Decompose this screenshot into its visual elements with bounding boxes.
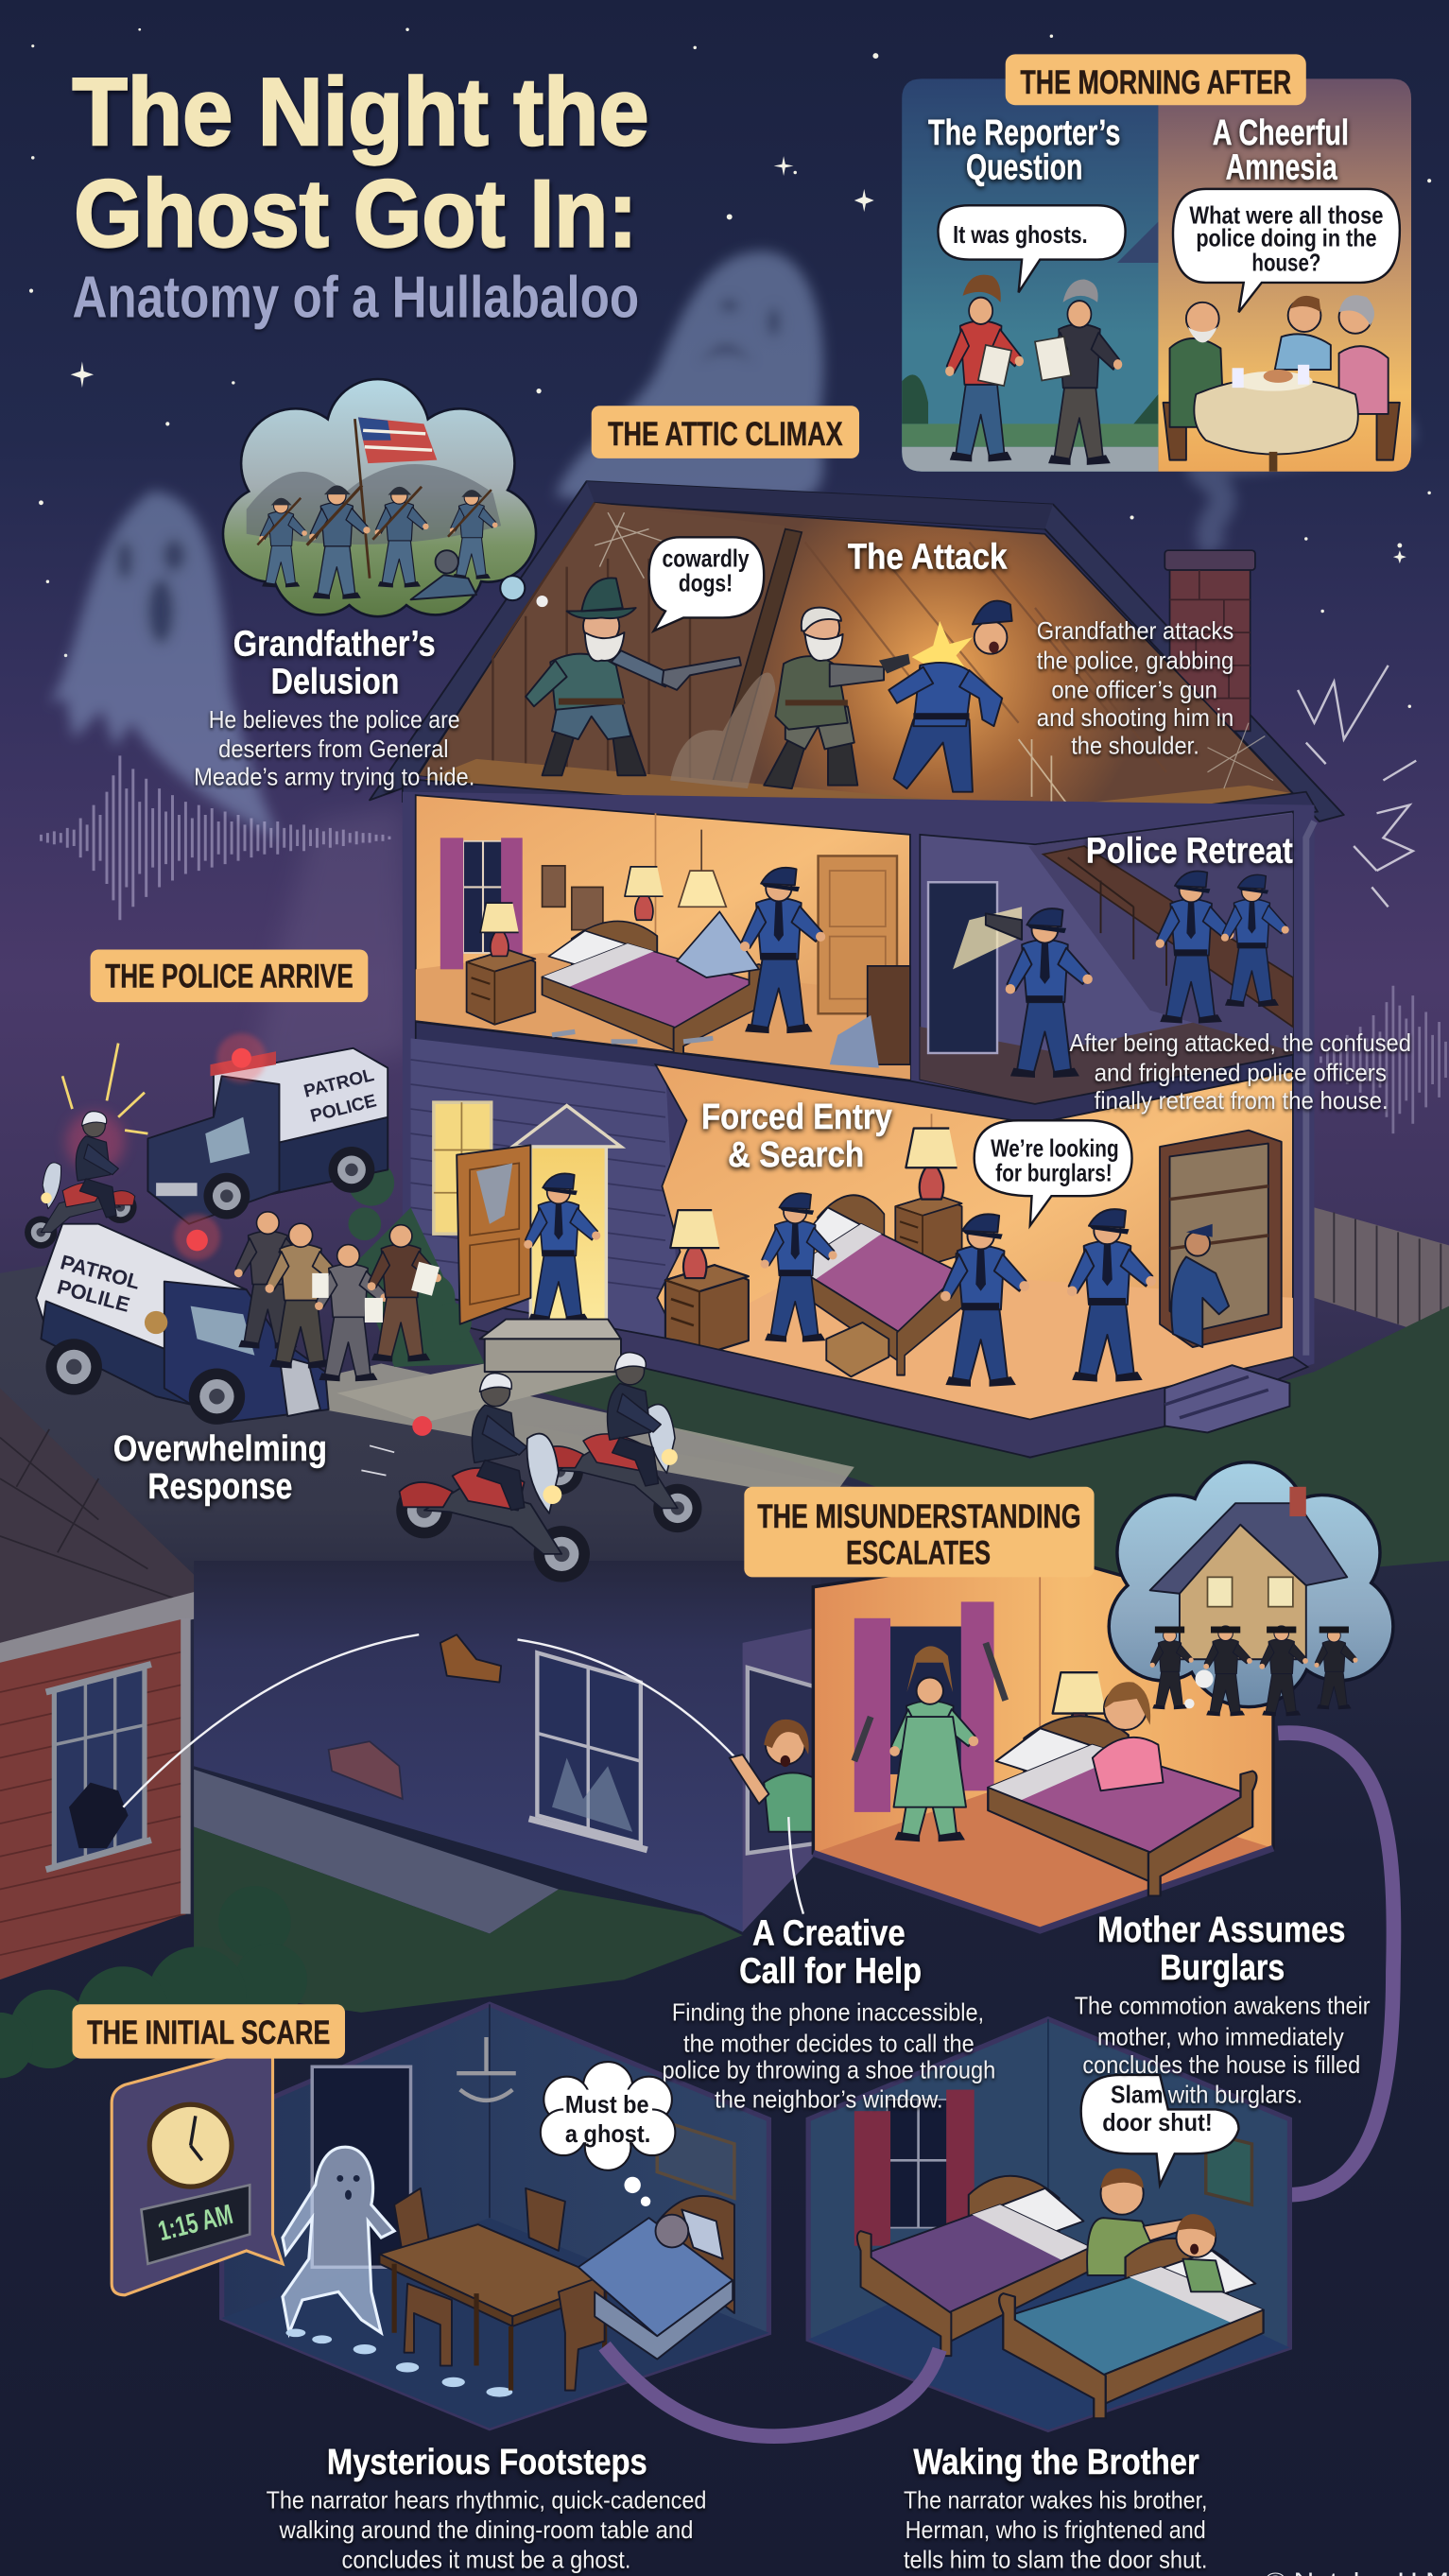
heading: grandfather's delusion: Delusion bbox=[271, 661, 399, 701]
panel: mother's bedroom bbox=[813, 1552, 1273, 1930]
title bbox=[72, 60, 649, 330]
neighbor's broken window bbox=[46, 1664, 151, 1870]
heading: a cheerful amnesia: Amnesia bbox=[1226, 147, 1337, 187]
shrubs by the house bbox=[348, 1122, 485, 1367]
sidewalk along side wall bbox=[194, 1770, 559, 1933]
thought dots: grandfather bbox=[500, 576, 548, 607]
heading: mother assumes burglars bbox=[1097, 1910, 1345, 1988]
heading: a cheerful amnesia bbox=[1213, 112, 1349, 187]
heading: overwhelming response bbox=[113, 1428, 327, 1507]
bubble: slam door shut bbox=[1081, 2075, 1239, 2185]
lawn patch bbox=[194, 1827, 743, 2013]
pointer to a creative call for help bbox=[788, 1817, 803, 1914]
text: mother assumes description bbox=[1075, 1992, 1371, 2108]
bubble: cowardly dogs: cowardly bbox=[662, 545, 750, 573]
text: waking the brother description: The narrator wakes his brother, bbox=[904, 2486, 1208, 2515]
title: The Night the bbox=[72, 60, 649, 165]
text: the attack description: Grandfather attacks bbox=[1037, 616, 1233, 645]
heading: overwhelming response: Overwhelming bbox=[113, 1428, 327, 1469]
muzzle flash bbox=[912, 621, 973, 690]
heading: grandfather's delusion bbox=[233, 623, 436, 701]
heading: waking the brother: Waking the Brother bbox=[913, 2442, 1199, 2482]
label: the morning after bbox=[1006, 54, 1306, 105]
heading: a creative call for help: A Creative bbox=[752, 1913, 906, 1954]
text: the attack description: and shooting him in bbox=[1037, 703, 1233, 732]
text: mysterious footsteps description bbox=[267, 2486, 706, 2573]
heading: overwhelming response: Response bbox=[147, 1466, 292, 1507]
heading: a cheerful amnesia: A Cheerful bbox=[1213, 112, 1349, 153]
text: creative call description: police by throwing a shoe through bbox=[662, 2055, 995, 2083]
heading: a creative call for help: Call for Help bbox=[739, 1951, 922, 1992]
text: mysterious footsteps description: walking around the dining-room table and bbox=[279, 2515, 693, 2544]
icon: patrol truck, upper bbox=[147, 1033, 388, 1224]
text: waking the brother description: Herman, who is frightened and bbox=[906, 2515, 1206, 2544]
heading: forced entry and search bbox=[701, 1097, 892, 1175]
thought dots: burglars bbox=[1184, 1670, 1214, 1708]
text: grandfather's delusion description bbox=[194, 705, 474, 791]
side wall window bbox=[529, 1652, 647, 1850]
thought cloud: burglars bbox=[1107, 1461, 1395, 1716]
house upper wall bbox=[403, 792, 1314, 1456]
figure: glowing ghost bbox=[283, 2147, 394, 2333]
bubble: slam door shut: door shut! bbox=[1102, 2108, 1213, 2136]
footprints bbox=[285, 2328, 512, 2397]
ghost: large background spirit bbox=[555, 251, 823, 503]
heading: mother assumes burglars: Mother Assumes bbox=[1097, 1910, 1345, 1950]
label: the misunderstanding escalates: ESCALATES bbox=[846, 1535, 991, 1571]
text: the attack description bbox=[1037, 616, 1233, 760]
text: grandfather's delusion description: He believes the police are bbox=[209, 705, 460, 734]
text: police retreat description bbox=[1070, 1029, 1411, 1115]
figure: older reporter in suit bbox=[1035, 279, 1122, 465]
bubble: it was ghosts: It was ghosts. bbox=[953, 220, 1088, 249]
panel: police retreat room bbox=[920, 812, 1293, 1104]
heading: the reporter's question bbox=[928, 112, 1120, 187]
label: the initial scare: THE INITIAL SCARE bbox=[87, 2015, 330, 2051]
figure: young reporter bbox=[945, 275, 1024, 461]
icon: patrol truck, lower bbox=[36, 1214, 329, 1425]
heading: mother assumes burglars: Burglars bbox=[1160, 1947, 1285, 1988]
text: mysterious footsteps description: concludes it must be a ghost. bbox=[342, 2545, 630, 2573]
bubble: what were all those police: house? bbox=[1251, 249, 1320, 277]
text: the attack description: one officer’s gun bbox=[1051, 676, 1217, 704]
figure: mother at the window bbox=[730, 1668, 817, 1853]
text: grandfather's delusion description: Meade’s army trying to hide. bbox=[194, 763, 474, 791]
label: the attic climax bbox=[592, 406, 859, 458]
icon: flying shoe bbox=[440, 1634, 501, 1683]
picture on dining wall bbox=[657, 2119, 734, 2198]
stars bbox=[29, 28, 1431, 708]
arrow: shoe trajectory to neighbor's window bbox=[123, 1634, 419, 1807]
text: mother assumes description: concludes the house is filled bbox=[1082, 2050, 1360, 2079]
text: mysterious footsteps description: The narrator hears rhythmic, quick-cadenced bbox=[267, 2486, 706, 2515]
text: waking the brother description bbox=[904, 2486, 1208, 2573]
text: police retreat description: and frightened police officers bbox=[1095, 1059, 1387, 1087]
heading: police retreat: Police Retreat bbox=[1086, 830, 1293, 871]
heading: the reporter's question: Question bbox=[966, 147, 1082, 187]
corner wall section bbox=[743, 1627, 821, 1932]
text: creative call description: Finding the phone inaccessible, bbox=[672, 1998, 984, 2027]
attic floor beam bbox=[403, 779, 1318, 851]
heading: forced entry and search: Forced Entry bbox=[701, 1097, 892, 1137]
heading: the reporter's question: The Reporter’s bbox=[928, 112, 1120, 153]
icon: patrol truck, lower: PATROL bbox=[58, 1250, 143, 1294]
alarm sparks, right of roof bbox=[1298, 666, 1416, 907]
thought cloud: civil war battlefield bbox=[222, 378, 537, 617]
text: police retreat description: After being attacked, the confused bbox=[1070, 1029, 1411, 1057]
heading: a creative call for help bbox=[739, 1913, 922, 1992]
bubble: looking for burglars bbox=[975, 1120, 1132, 1225]
front siding wall bbox=[411, 1038, 681, 1340]
heading: grandfather's delusion: Grandfather’s bbox=[233, 623, 436, 664]
label: the initial scare bbox=[72, 2004, 345, 2059]
label: the police arrive bbox=[91, 949, 368, 1002]
side wall of the house bbox=[194, 1561, 821, 1932]
hedge bbox=[0, 1886, 307, 2078]
dining table and chairs bbox=[380, 2188, 610, 2391]
bubble: looking for burglars: We’re looking bbox=[991, 1133, 1119, 1162]
panel: forced entry room bbox=[656, 1064, 1293, 1420]
panel: the morning after bbox=[902, 78, 1411, 472]
yard and lawn bbox=[526, 1306, 1449, 1585]
label: the police arrive: THE POLICE ARRIVE bbox=[105, 959, 354, 994]
heading: forced entry and search: & Search bbox=[728, 1134, 864, 1175]
chimney bbox=[1164, 550, 1255, 731]
text: the attack description: the police, grabbing bbox=[1037, 646, 1233, 674]
figure: officer being shot bbox=[888, 601, 1012, 792]
bubble: what were all those police bbox=[1173, 189, 1400, 312]
connector: from mother's room to brothers' room bbox=[1278, 1733, 1393, 2195]
text: grandfather's delusion description: deserters from General bbox=[218, 735, 448, 763]
heading: mysterious footsteps: Mysterious Footsteps bbox=[327, 2442, 647, 2482]
bubble: looking for burglars: for burglars! bbox=[995, 1159, 1113, 1187]
front door and porch bbox=[434, 1102, 621, 1372]
connector: from dining room to brothers' room bbox=[605, 2346, 940, 2436]
label: the attic climax: THE ATTIC CLIMAX bbox=[608, 417, 843, 453]
text: creative call description: the mother decides to call the bbox=[683, 2030, 975, 2058]
house foundation bbox=[411, 1291, 1308, 1458]
figure: grandfather with revolver bbox=[526, 578, 741, 775]
title: Ghost Got In: bbox=[74, 162, 637, 268]
dining family with table bbox=[1164, 295, 1400, 472]
text: mother assumes description: with burglars. bbox=[1167, 2080, 1302, 2108]
floor beam bbox=[416, 1022, 1293, 1124]
label: the misunderstanding escalates bbox=[744, 1487, 1095, 1577]
sound waveform, left bbox=[41, 755, 389, 920]
bubble: slam door shut: Slam bbox=[1111, 2080, 1164, 2108]
ghost: left spirit bbox=[49, 492, 279, 838]
text: waking the brother description: tells him to slam the door shut. bbox=[904, 2545, 1208, 2573]
bubble: it was ghosts bbox=[938, 205, 1126, 292]
label: the misunderstanding escalates: THE MISUNDERSTANDING bbox=[757, 1499, 1081, 1535]
sidewalk and front walk bbox=[323, 1363, 854, 1501]
smoke drifting from the chimney bbox=[1199, 427, 1413, 550]
icon: patrol truck, upper: PATROL bbox=[302, 1065, 376, 1102]
heading: the attack: The Attack bbox=[848, 536, 1008, 577]
panel: attic cross-section bbox=[419, 503, 1293, 828]
bubble: cowardly dogs bbox=[649, 537, 764, 631]
icon: motorcycles in foreground bbox=[361, 1353, 702, 1582]
subtitle: Anatomy of a Hullabaloo bbox=[72, 264, 639, 330]
thought cloud: must be a ghost bbox=[541, 2062, 675, 2170]
thought dots: ghost bbox=[624, 2177, 650, 2206]
panel: second floor bedroom bbox=[416, 795, 910, 1080]
arrow: shoe trajectory from mother's window bbox=[518, 1639, 748, 1771]
neighbor house wall bbox=[0, 1618, 191, 1980]
back steps bbox=[1164, 1365, 1289, 1432]
text: the attack description: the shoulder. bbox=[1071, 732, 1199, 760]
figure: grandfather shooting bbox=[764, 608, 910, 788]
street bbox=[0, 1256, 854, 1618]
neighbor house roof bbox=[0, 1389, 216, 1664]
text: creative call description: the neighbor’s window. bbox=[715, 2085, 943, 2114]
text: mother assumes description: The commotion awakens their bbox=[1075, 1992, 1371, 2020]
panel: brothers' bedroom bbox=[808, 2019, 1289, 2429]
label: the morning after: THE MORNING AFTER bbox=[1020, 65, 1291, 101]
text: creative call description bbox=[662, 1998, 995, 2114]
searchlight haze, left bbox=[247, 805, 411, 1084]
drainpipe bbox=[1306, 821, 1314, 1356]
text: police retreat description: finally retreat from the house. bbox=[1095, 1086, 1389, 1115]
thought cloud: must be a ghost: Must be bbox=[565, 2090, 649, 2118]
brick patch bbox=[329, 1741, 403, 1799]
sound waveform, right bbox=[1320, 986, 1446, 1133]
bubble: what were all those police: police doing in the bbox=[1196, 224, 1377, 252]
bubble: what were all those police: What were all those bbox=[1189, 200, 1383, 229]
back fence bbox=[1314, 1207, 1449, 1340]
bubble: cowardly dogs: dogs! bbox=[679, 569, 733, 597]
icon: patrol truck, upper: POLICE bbox=[308, 1091, 378, 1127]
bed with sleeping narrator bbox=[578, 2196, 734, 2360]
text: mother assumes description: mother, who immediately bbox=[1097, 2023, 1344, 2051]
house roof bbox=[370, 481, 1344, 821]
icon: motorcycle with officer, top left bbox=[25, 1044, 147, 1249]
icon: patrol truck, lower: POLILE bbox=[55, 1274, 132, 1317]
clock panel: 1:15 AM bbox=[155, 2199, 236, 2247]
thought cloud: must be a ghost: a ghost. bbox=[565, 2119, 650, 2148]
group: reporters with notepads bbox=[234, 1212, 441, 1381]
panel: dining room with ghost bbox=[222, 2004, 768, 2429]
clock panel bbox=[112, 2047, 283, 2295]
